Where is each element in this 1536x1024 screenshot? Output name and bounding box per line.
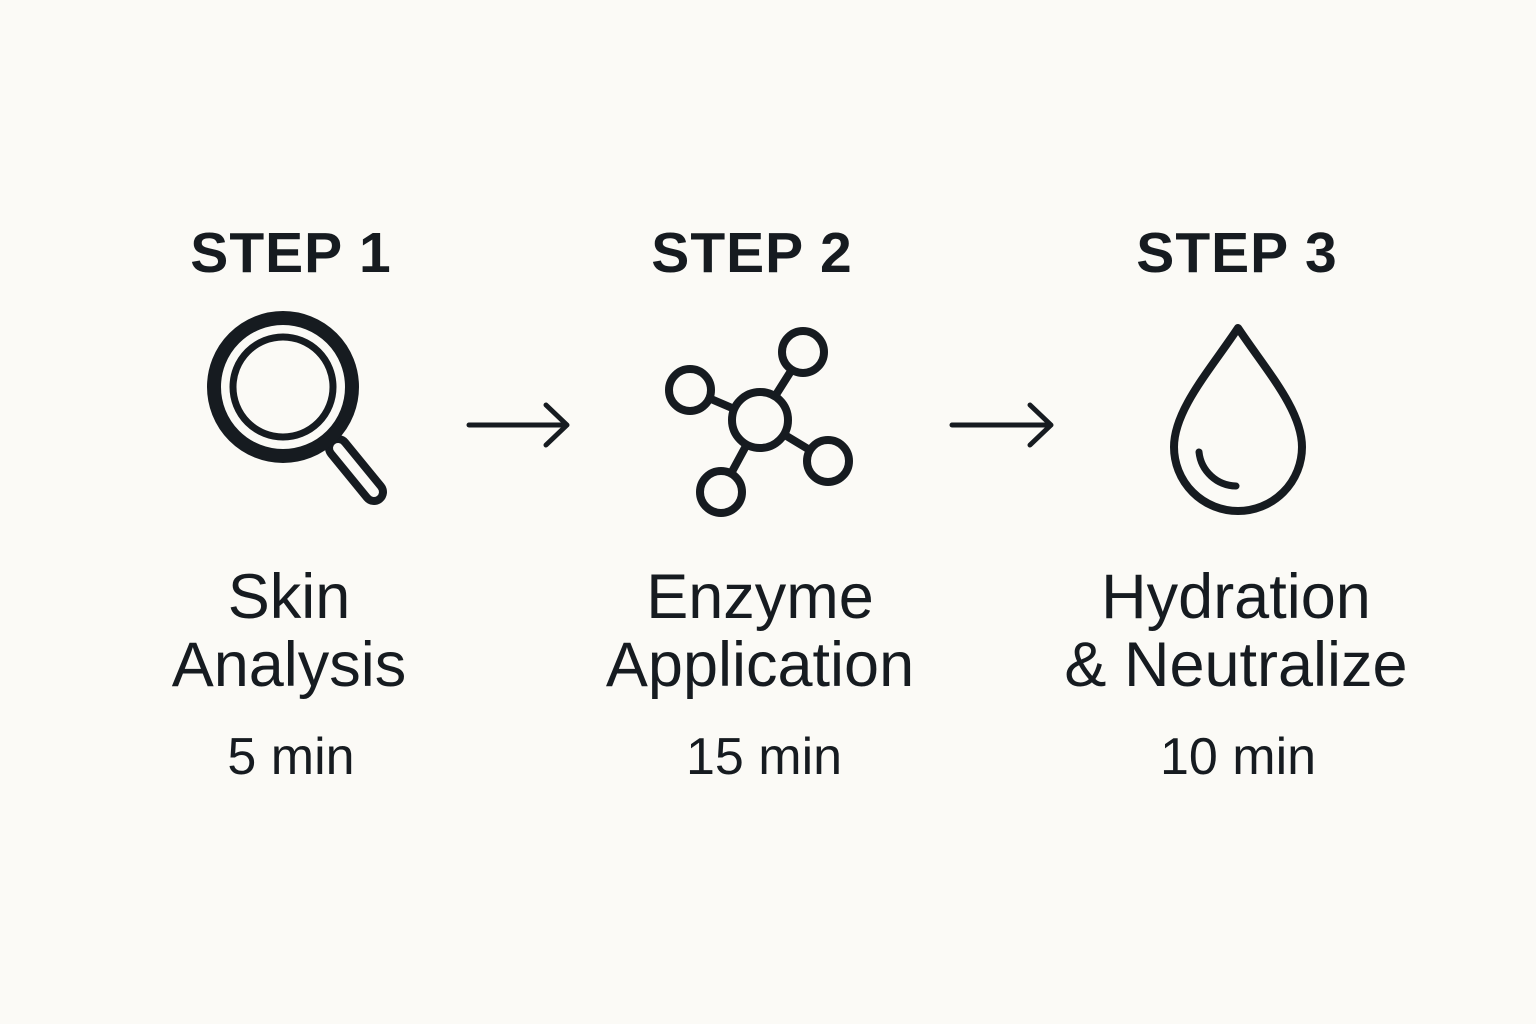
text: step 2 name (606, 562, 914, 700)
title: step 3: STEP 3 (1136, 221, 1338, 285)
icon: molecule (669, 331, 849, 513)
text: step 2 name: Enzyme (646, 562, 874, 632)
text: step 1 name: Analysis (172, 630, 406, 700)
title: step 1: STEP 1 (190, 221, 392, 285)
text: step 3 name: & Neutralize (1064, 630, 1408, 700)
icon: drop (1174, 328, 1302, 511)
title: step 2: STEP 2 (651, 221, 853, 285)
arrow 1 (469, 405, 567, 445)
text: step 3 time: 10 min (1160, 728, 1316, 786)
text: step 1 time: 5 min (227, 728, 355, 786)
text: step 3 name: Hydration (1101, 562, 1371, 632)
icon: magnifier (214, 318, 374, 492)
text: step 1 name (172, 562, 406, 700)
text: step 2 name: Application (606, 630, 914, 700)
text: step 2 time: 15 min (686, 728, 842, 786)
text: step 1 name: Skin (228, 562, 350, 632)
arrow 2 (952, 405, 1051, 445)
text: step 3 name (1064, 562, 1408, 700)
